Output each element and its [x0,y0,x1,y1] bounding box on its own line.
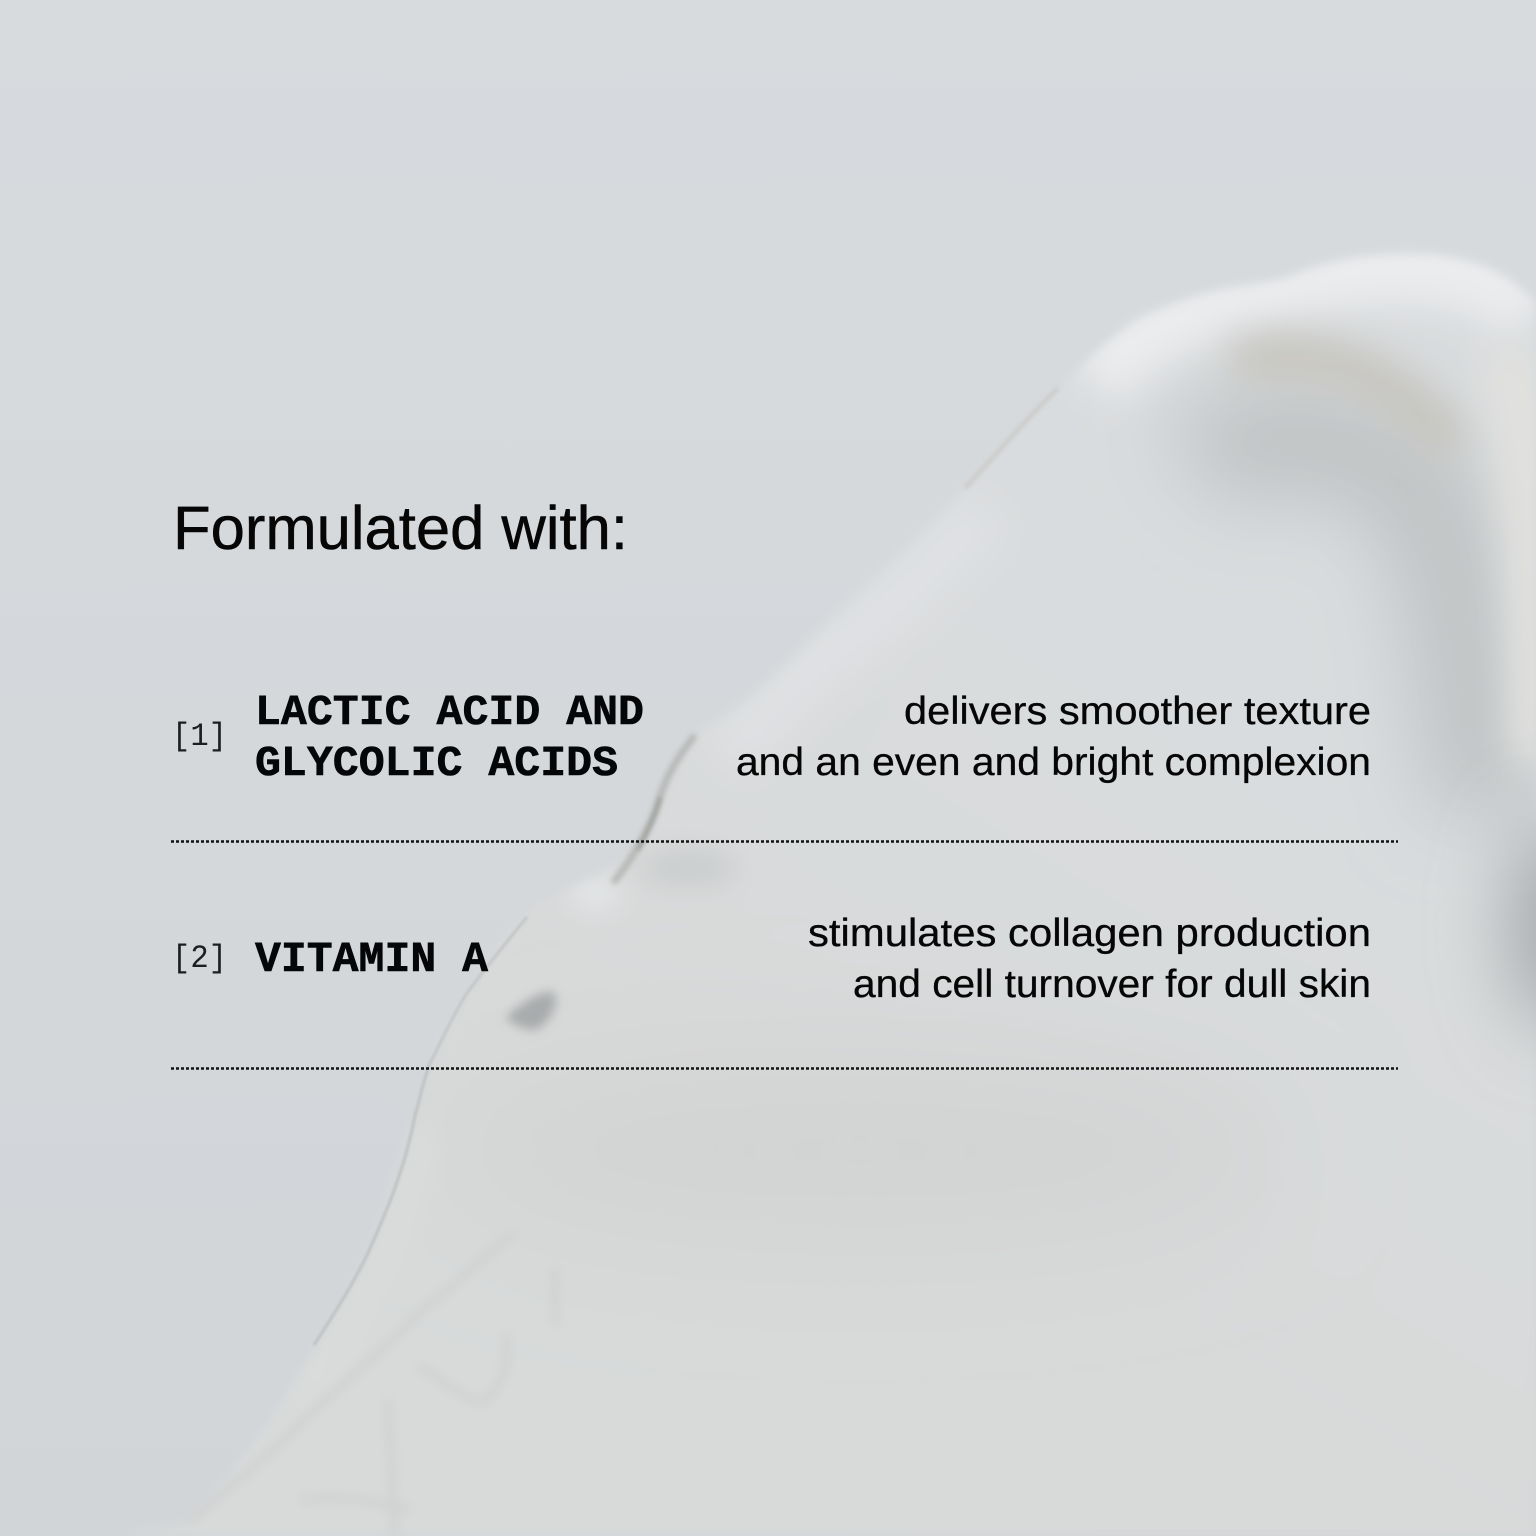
crease: faint outer crease [188,1233,513,1523]
crease: upper edge [965,388,1058,488]
crease: lower edge [430,917,527,1063]
title: Formulated with: [173,494,628,562]
row 1 number: [1] [172,718,227,755]
row 2 ingredient name: VITAMIN A [255,935,488,984]
row 1 ingredient name second line: GLYCOLIC ACIDS [255,739,618,788]
swatch body and shading [568,252,1534,915]
warm tone under ridge [1235,356,1450,450]
row 1 description line 1: delivers smoother texture [904,690,1371,733]
pale band at right [1505,350,1536,760]
row 2 description line 1: stimulates collagen production [808,912,1371,955]
faint veins near bottom [300,1267,555,1536]
shadow beside fold [654,854,721,882]
row 2 description line 2: and cell turnover for dull skin [853,963,1371,1006]
row 2: vitamin a [172,912,1371,1006]
cream swatch [314,252,1534,1346]
pale strip between lower creases [300,1130,420,1400]
crease: central fold [613,735,695,883]
dark shadow at right edge [1514,820,1536,1030]
white ridge along top [1090,262,1536,375]
crease: central fold core [638,797,660,850]
row 1: lactic and glycolic acids [172,688,1371,788]
light band along diagonal edge [725,510,985,755]
row 1 ingredient name: LACTIC ACID AND [255,688,644,737]
page canvas [171,252,1536,1513]
row 1 description line 2: and an even and bright complexion [736,741,1371,784]
grey shadow under ridge [1200,438,1485,810]
glossy highlight [582,883,608,903]
dimple [505,992,556,1030]
crease: long crease at left [314,1063,430,1345]
lower shaded area [440,1060,1280,1240]
row 2 number: [2] [172,940,227,977]
